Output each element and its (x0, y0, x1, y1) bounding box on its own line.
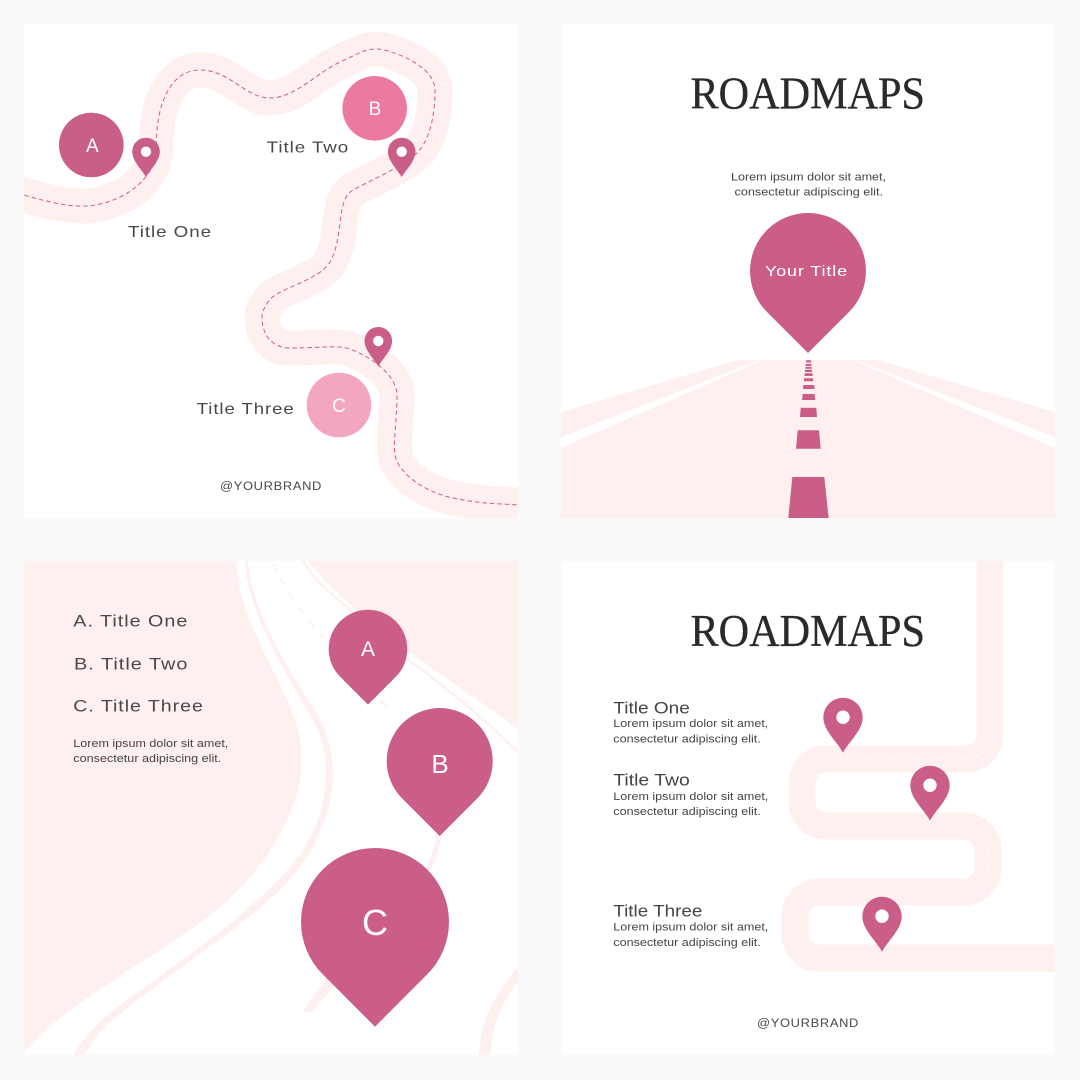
brand handle: @YOURBRAND (220, 481, 322, 493)
block: title one: consectetur adipiscing elit. (613, 734, 761, 746)
teardrop marker A: A (361, 638, 375, 661)
large pin: your title: Your Title (765, 264, 848, 280)
road background shapes (24, 561, 518, 1055)
road centre dashes (788, 360, 829, 518)
intro text (731, 172, 886, 198)
panel background (24, 24, 518, 518)
teardrop marker A (329, 610, 407, 705)
block: title two: consectetur adipiscing elit. (613, 806, 761, 818)
circle A: A (86, 136, 99, 157)
list: title three: C. Title Three (73, 697, 204, 716)
panel background (24, 561, 518, 1055)
block: title three: Title Three (613, 903, 702, 921)
location pin three (862, 897, 902, 952)
intro text: consectetur adipiscing elit. (734, 186, 883, 198)
location pin one (823, 698, 863, 753)
intro text: Lorem ipsum dolor sit amet, (731, 172, 886, 184)
circle C: C (332, 396, 346, 417)
block: title three (613, 903, 768, 949)
circle B: B (369, 99, 381, 120)
block: title three: consectetur adipiscing elit. (613, 937, 761, 949)
panel background (561, 24, 1055, 518)
switchback road (795, 561, 1056, 958)
panel background (561, 561, 1055, 1055)
teardrop marker C (301, 848, 449, 1027)
circle B (342, 76, 407, 141)
block: title one: Lorem ipsum dolor sit amet, (613, 718, 768, 730)
panel: straight road with title (561, 78, 1055, 518)
list: title two: B. Title Two (74, 655, 188, 674)
block: title two (613, 772, 768, 818)
panel: winding road map (10, 24, 530, 518)
circle C (307, 373, 371, 437)
label: title one: Title One (128, 224, 212, 241)
block: title one: Title One (613, 699, 690, 717)
block: title one (613, 699, 768, 746)
body text: consectetur adipiscing elit. (73, 753, 221, 765)
block: title three: Lorem ipsum dolor sit amet, (613, 922, 768, 934)
label: title three: Title Three (197, 401, 295, 418)
teardrop marker B: B (431, 749, 449, 779)
block: title two: Lorem ipsum dolor sit amet, (613, 791, 768, 803)
large pin: your title (750, 213, 866, 353)
brand handle: @YOURBRAND (757, 1018, 859, 1030)
location pin three (364, 327, 392, 367)
panel: switchback road with titles (614, 561, 1055, 1029)
heading: ROADMAPS (690, 606, 925, 656)
circle A (59, 113, 124, 177)
teardrop marker C: C (362, 902, 388, 943)
winding road (10, 49, 530, 506)
body text: Lorem ipsum dolor sit amet, (73, 738, 228, 750)
location pin two (388, 138, 416, 177)
location pin two (910, 766, 950, 821)
label: title two: Title Two (267, 140, 349, 156)
panel: list with teardrop markers (24, 561, 518, 1055)
block: title two: Title Two (613, 772, 690, 790)
heading: ROADMAPS (690, 68, 925, 118)
road surface and shoulders (561, 360, 1055, 518)
body text (73, 738, 228, 765)
list: title one: A. Title One (73, 612, 188, 631)
teardrop marker B (387, 708, 493, 836)
location pin one (132, 138, 160, 177)
